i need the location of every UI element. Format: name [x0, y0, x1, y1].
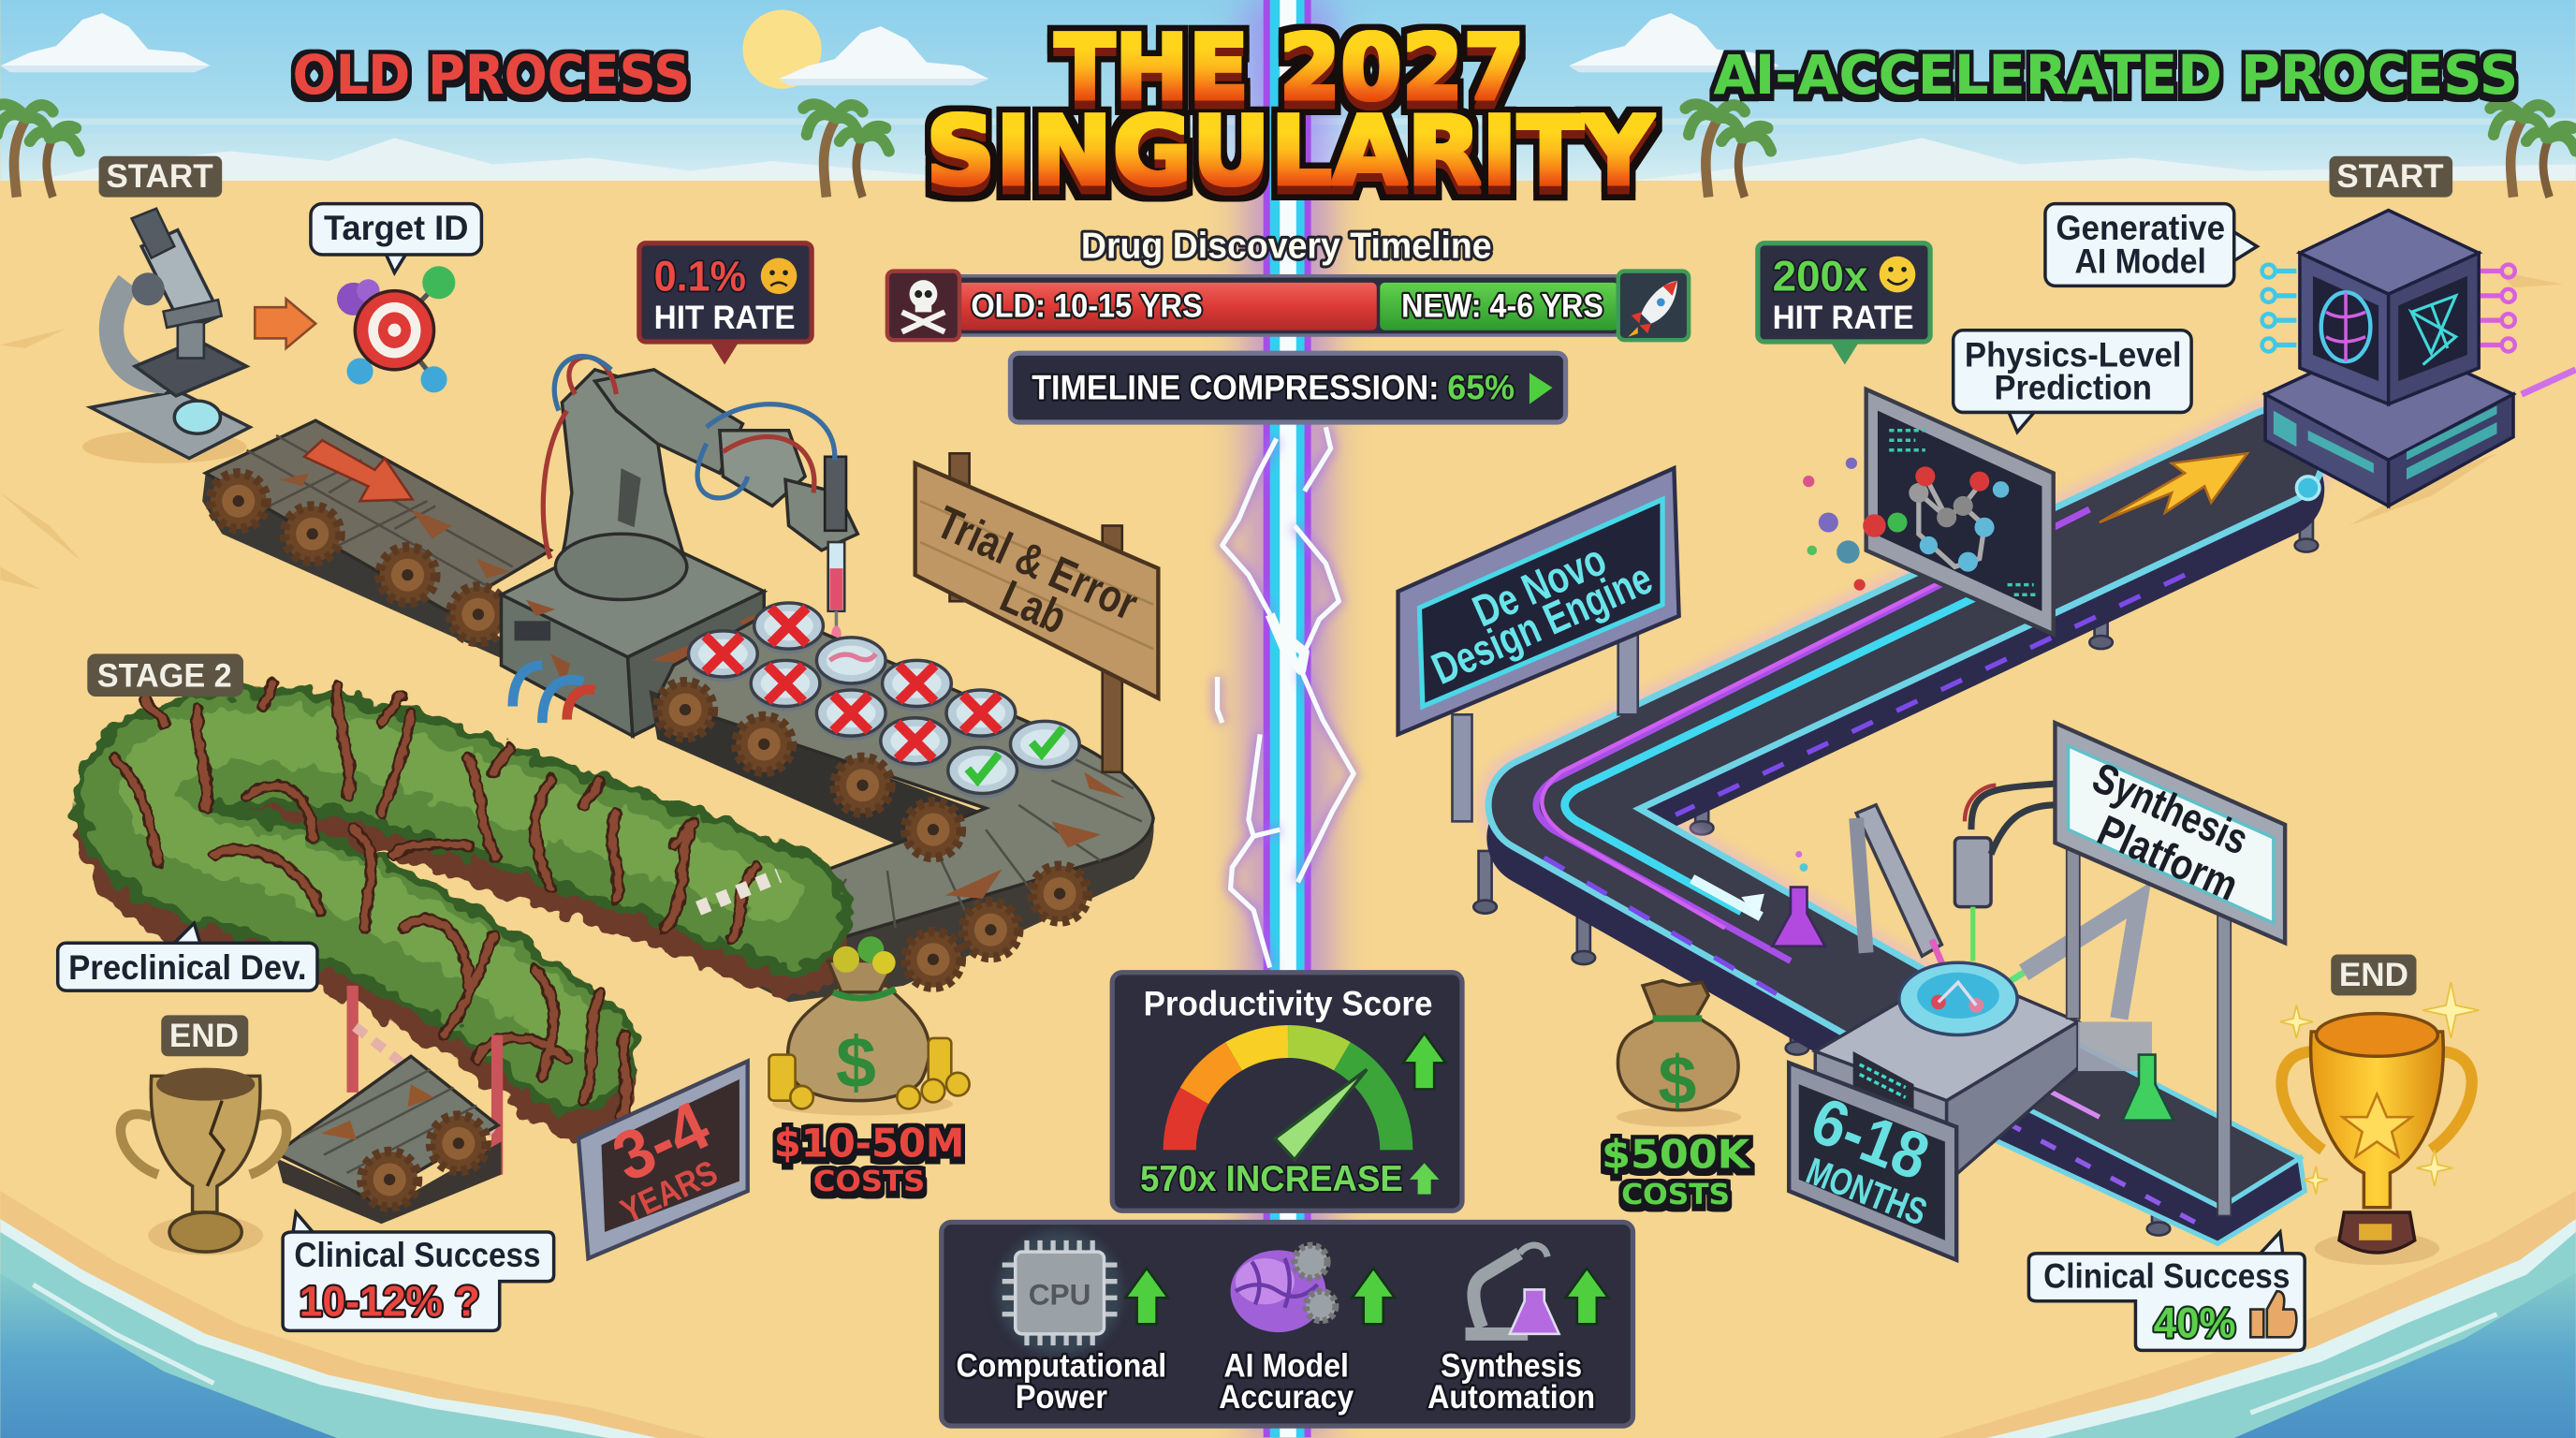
title: SINGULARITY [926, 97, 1655, 208]
sign: synthesis platform: Platform [2091, 806, 2246, 910]
badge: timeline compression [1010, 353, 1566, 422]
text: computational power: Computational [957, 1347, 1166, 1384]
callout: physics-level prediction [1954, 330, 2191, 432]
gauge heading: Productivity Score [1144, 984, 1432, 1022]
stat card: 0.1% hit rate [639, 243, 812, 365]
icon: old money bag with coins [769, 936, 970, 1115]
stat card: 200x hit rate: HIT RATE [1773, 300, 1914, 336]
icon: cracked trophy [121, 1068, 286, 1255]
sign: trial and error lab: Trial & Error [929, 497, 1145, 630]
heading: AI-accelerated process: AI-ACCELERATED PROCESS [1713, 43, 2518, 107]
text: synthesis automation: Automation [1427, 1379, 1595, 1416]
icon: gold trophy [2280, 982, 2479, 1265]
callout: target ID [311, 204, 481, 272]
panel: productivity score gauge [1112, 973, 1462, 1211]
callout: physics-level prediction: Prediction [1995, 368, 2152, 406]
robot arms and synthesis machine [1815, 784, 2152, 1182]
label: end old: END [169, 1018, 239, 1054]
conveyor: neon AI belt [1536, 457, 2320, 1051]
conveyor: old last belt [276, 986, 503, 1224]
stat: old costs: $10-50M [774, 1120, 964, 1166]
icon: new money bag [1617, 981, 1741, 1127]
gauge dial [1179, 1041, 1397, 1160]
panel: driver metrics [942, 1223, 1632, 1426]
central energy divider: beam and lightning [1218, 0, 1354, 1437]
stat: old costs [774, 1120, 964, 1198]
stat card: 0.1% hit rate: HIT RATE [654, 300, 796, 336]
icon: CPU chip [997, 1230, 1122, 1356]
icon: computational power arrow [1125, 1269, 1168, 1324]
sign: synthesis platform: Synthesis [2086, 754, 2255, 864]
text: AI model accuracy: AI Model [1224, 1347, 1349, 1384]
icon: gauge arrow [1403, 1034, 1445, 1089]
stat: old costs: COSTS [813, 1166, 925, 1198]
sign: trial and error lab: Lab [993, 571, 1074, 644]
screen: 3-4 years: 3-4 [601, 1086, 721, 1196]
label: start AI: START [2336, 158, 2444, 195]
sign: trial and error lab [915, 453, 1158, 772]
conveyor: neon final belt [1963, 1032, 2305, 1243]
sun and clouds [0, 10, 1779, 89]
barrier on old track [698, 875, 779, 908]
icon: CPU chip: CPU [1029, 1277, 1090, 1311]
text: synthesis automation: Synthesis [1441, 1347, 1582, 1384]
callout: preclinical dev [58, 923, 317, 990]
text: AI model accuracy: Accuracy [1219, 1379, 1354, 1416]
stat card: 0.1% hit rate: 0.1% [654, 253, 746, 301]
old duration bar: OLD: 10-15 YRS [971, 288, 1203, 325]
sign: de novo design engine: De Novo [1466, 535, 1614, 637]
text: synthesis automation [1427, 1347, 1595, 1416]
stat: new costs [1602, 1132, 1751, 1211]
callout: physics-level prediction: Physics-Level [1965, 335, 2182, 374]
callout: AI clinical success [2028, 1232, 2305, 1350]
screen: 6-18 months: MONTHS [1801, 1149, 1933, 1234]
sign: synthesis platform [2055, 723, 2285, 1215]
conveyor legs [1473, 490, 2318, 1236]
screen: 3-4 years [578, 1062, 748, 1258]
icon: energy arrow on belt [2100, 453, 2247, 522]
flask: purple on belt [1773, 851, 1825, 946]
callout: preclinical dev: Preclinical Dev. [68, 948, 307, 987]
sign: de novo design engine [1398, 468, 1679, 821]
icon: robot arm and flask [1466, 1245, 1559, 1334]
icon: rocket [1618, 271, 1689, 340]
icon: brain with gears [1231, 1245, 1336, 1332]
screen: molecule monitor [1803, 389, 2054, 634]
robot arm and rusty base [501, 356, 857, 736]
stat: 570x increase: 570x INCREASE [1140, 1159, 1403, 1199]
icon: AI model arrow [1352, 1269, 1395, 1324]
heading: old process: OLD PROCESS [293, 43, 690, 107]
callout: generative AI model: Generative [2056, 209, 2225, 247]
icon: microscope [82, 209, 250, 463]
text: AI model accuracy [1219, 1347, 1354, 1416]
conveyor: old second belt with test dishes [649, 603, 1154, 1002]
panel: drug discovery timeline [887, 226, 1689, 340]
thorny overgrown hedge path [115, 683, 789, 1117]
timeline heading: Drug Discovery Timeline [1081, 226, 1492, 266]
icon: old money bag with coins: $ [836, 1023, 876, 1104]
old duration bar [958, 283, 1377, 330]
conveyor: old rusty first belt [202, 420, 550, 660]
callout: generative AI model [2045, 204, 2257, 286]
screen: 6-18 months [1789, 1063, 1956, 1260]
badge: timeline compression: TIMELINE COMPRESSION: [1032, 368, 1439, 406]
callout: target ID: Target ID [324, 209, 468, 247]
stat card: 200x hit rate: 200x [1773, 253, 1868, 301]
label: end AI: END [2339, 957, 2408, 993]
title [926, 14, 1655, 208]
icon: new money bag: $ [1658, 1041, 1696, 1119]
palm trees [0, 104, 2576, 198]
callout: generative AI model: AI Model [2075, 242, 2206, 280]
badge: timeline compression: 65% [1447, 368, 1515, 406]
callout: old clinical success [283, 1212, 554, 1330]
stat: new costs: COSTS [1621, 1179, 1730, 1211]
callout: old clinical success: Clinical Success [294, 1236, 541, 1274]
icon: skull [887, 271, 959, 340]
icon: AI computer cube [2262, 211, 2576, 506]
stat card: 200x hit rate [1758, 243, 1930, 365]
icon: automation arrow [1566, 1269, 1608, 1324]
new duration bar: NEW: 4-6 YRS [1401, 288, 1603, 325]
screen: 6-18 months: 6-18 [1802, 1082, 1939, 1194]
label: stage 2: STAGE 2 [97, 657, 232, 694]
callout: AI clinical success: 40% [2154, 1299, 2235, 1346]
screen: 3-4 years: YEARS [615, 1152, 724, 1231]
text: computational power: Power [1016, 1379, 1107, 1416]
callout: AI clinical success: Clinical Success [2043, 1257, 2290, 1296]
title: THE 2027 [1055, 14, 1525, 120]
timeline track [936, 276, 1643, 335]
callout: old clinical success: 10-12% ? [300, 1278, 480, 1326]
sign: de novo design engine: Design Engine [1425, 553, 1660, 695]
label: start old: START [106, 158, 213, 195]
arrow: microscope to target [255, 299, 315, 348]
icon: target with molecules [337, 266, 455, 392]
flask: green on belt [2122, 1055, 2174, 1121]
text: computational power [957, 1347, 1166, 1416]
new duration bar [1380, 283, 1618, 330]
stat: new costs: $500K [1602, 1132, 1751, 1178]
